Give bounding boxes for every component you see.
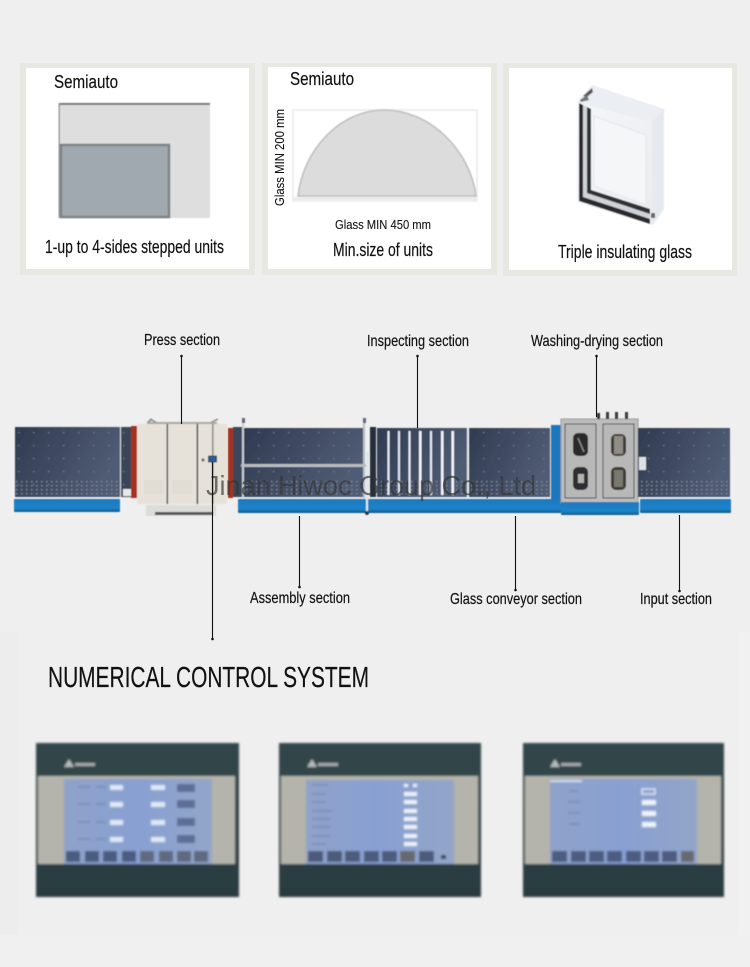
- blue base conveyor: [368, 499, 561, 513]
- input glass panel left: [15, 427, 132, 497]
- callout line: numerical control: [211, 462, 214, 640]
- callout: input section: [640, 515, 712, 608]
- callout: inspecting section: Inspecting section: [367, 333, 469, 350]
- callout: washing-drying section: Washing-drying section: [531, 333, 663, 350]
- callout: assembly section: Assembly section: [250, 590, 350, 607]
- caption: minimum size: Min.size of units: [333, 239, 433, 260]
- heading: semiauto: Semiauto: [290, 69, 354, 89]
- callout: glass conveyor section: Glass conveyor section: [450, 591, 582, 608]
- assembly section panel: [241, 418, 366, 498]
- control screen 3: [523, 743, 724, 897]
- label: height dimension: Glass MIN 200 mm: [272, 109, 287, 206]
- callout: press section: Press section: [144, 332, 220, 349]
- press section body: [131, 419, 243, 516]
- blue base left: [14, 499, 120, 512]
- watermark: Jinan Hiwoc Group Co., Ltd: [206, 470, 536, 501]
- control screen 2: [279, 743, 481, 897]
- washing-drying section cabinet: [561, 412, 638, 503]
- caption: stepped units: 1-up to 4-sides stepped units: [45, 236, 224, 257]
- callout: press section: [144, 332, 220, 424]
- panel: triple glass: [503, 63, 737, 276]
- panel: stepped units: [20, 63, 255, 275]
- blue base washer: [561, 502, 639, 515]
- heading: numerical control system: NUMERICAL CONTROL SYSTEM: [48, 662, 369, 694]
- blue base input: [640, 499, 731, 513]
- blue column: [551, 425, 562, 500]
- callout: inspecting section: [367, 333, 469, 428]
- blue base assembly: [238, 499, 366, 513]
- half-round glass diagram: [292, 110, 477, 201]
- stepped unit diagram: [58, 103, 210, 218]
- production line machine: [14, 412, 731, 516]
- callout: assembly section: [250, 516, 350, 607]
- input section panel: [638, 428, 730, 497]
- callout: washing-drying section: [531, 333, 663, 417]
- caption: triple glass: Triple insulating glass: [558, 241, 692, 262]
- heading: semiauto: Semiauto: [54, 72, 118, 92]
- callout: input section: Input section: [640, 591, 712, 608]
- inspecting section panel: [370, 427, 469, 497]
- control screen 1: [36, 743, 239, 897]
- label: width dimension: Glass MIN 450 mm: [335, 217, 431, 232]
- icon: triple glazed unit: [577, 85, 664, 225]
- panel: minimum size: [262, 63, 497, 275]
- callout: glass conveyor section: [450, 516, 582, 608]
- glass conveyor panel: [469, 428, 550, 497]
